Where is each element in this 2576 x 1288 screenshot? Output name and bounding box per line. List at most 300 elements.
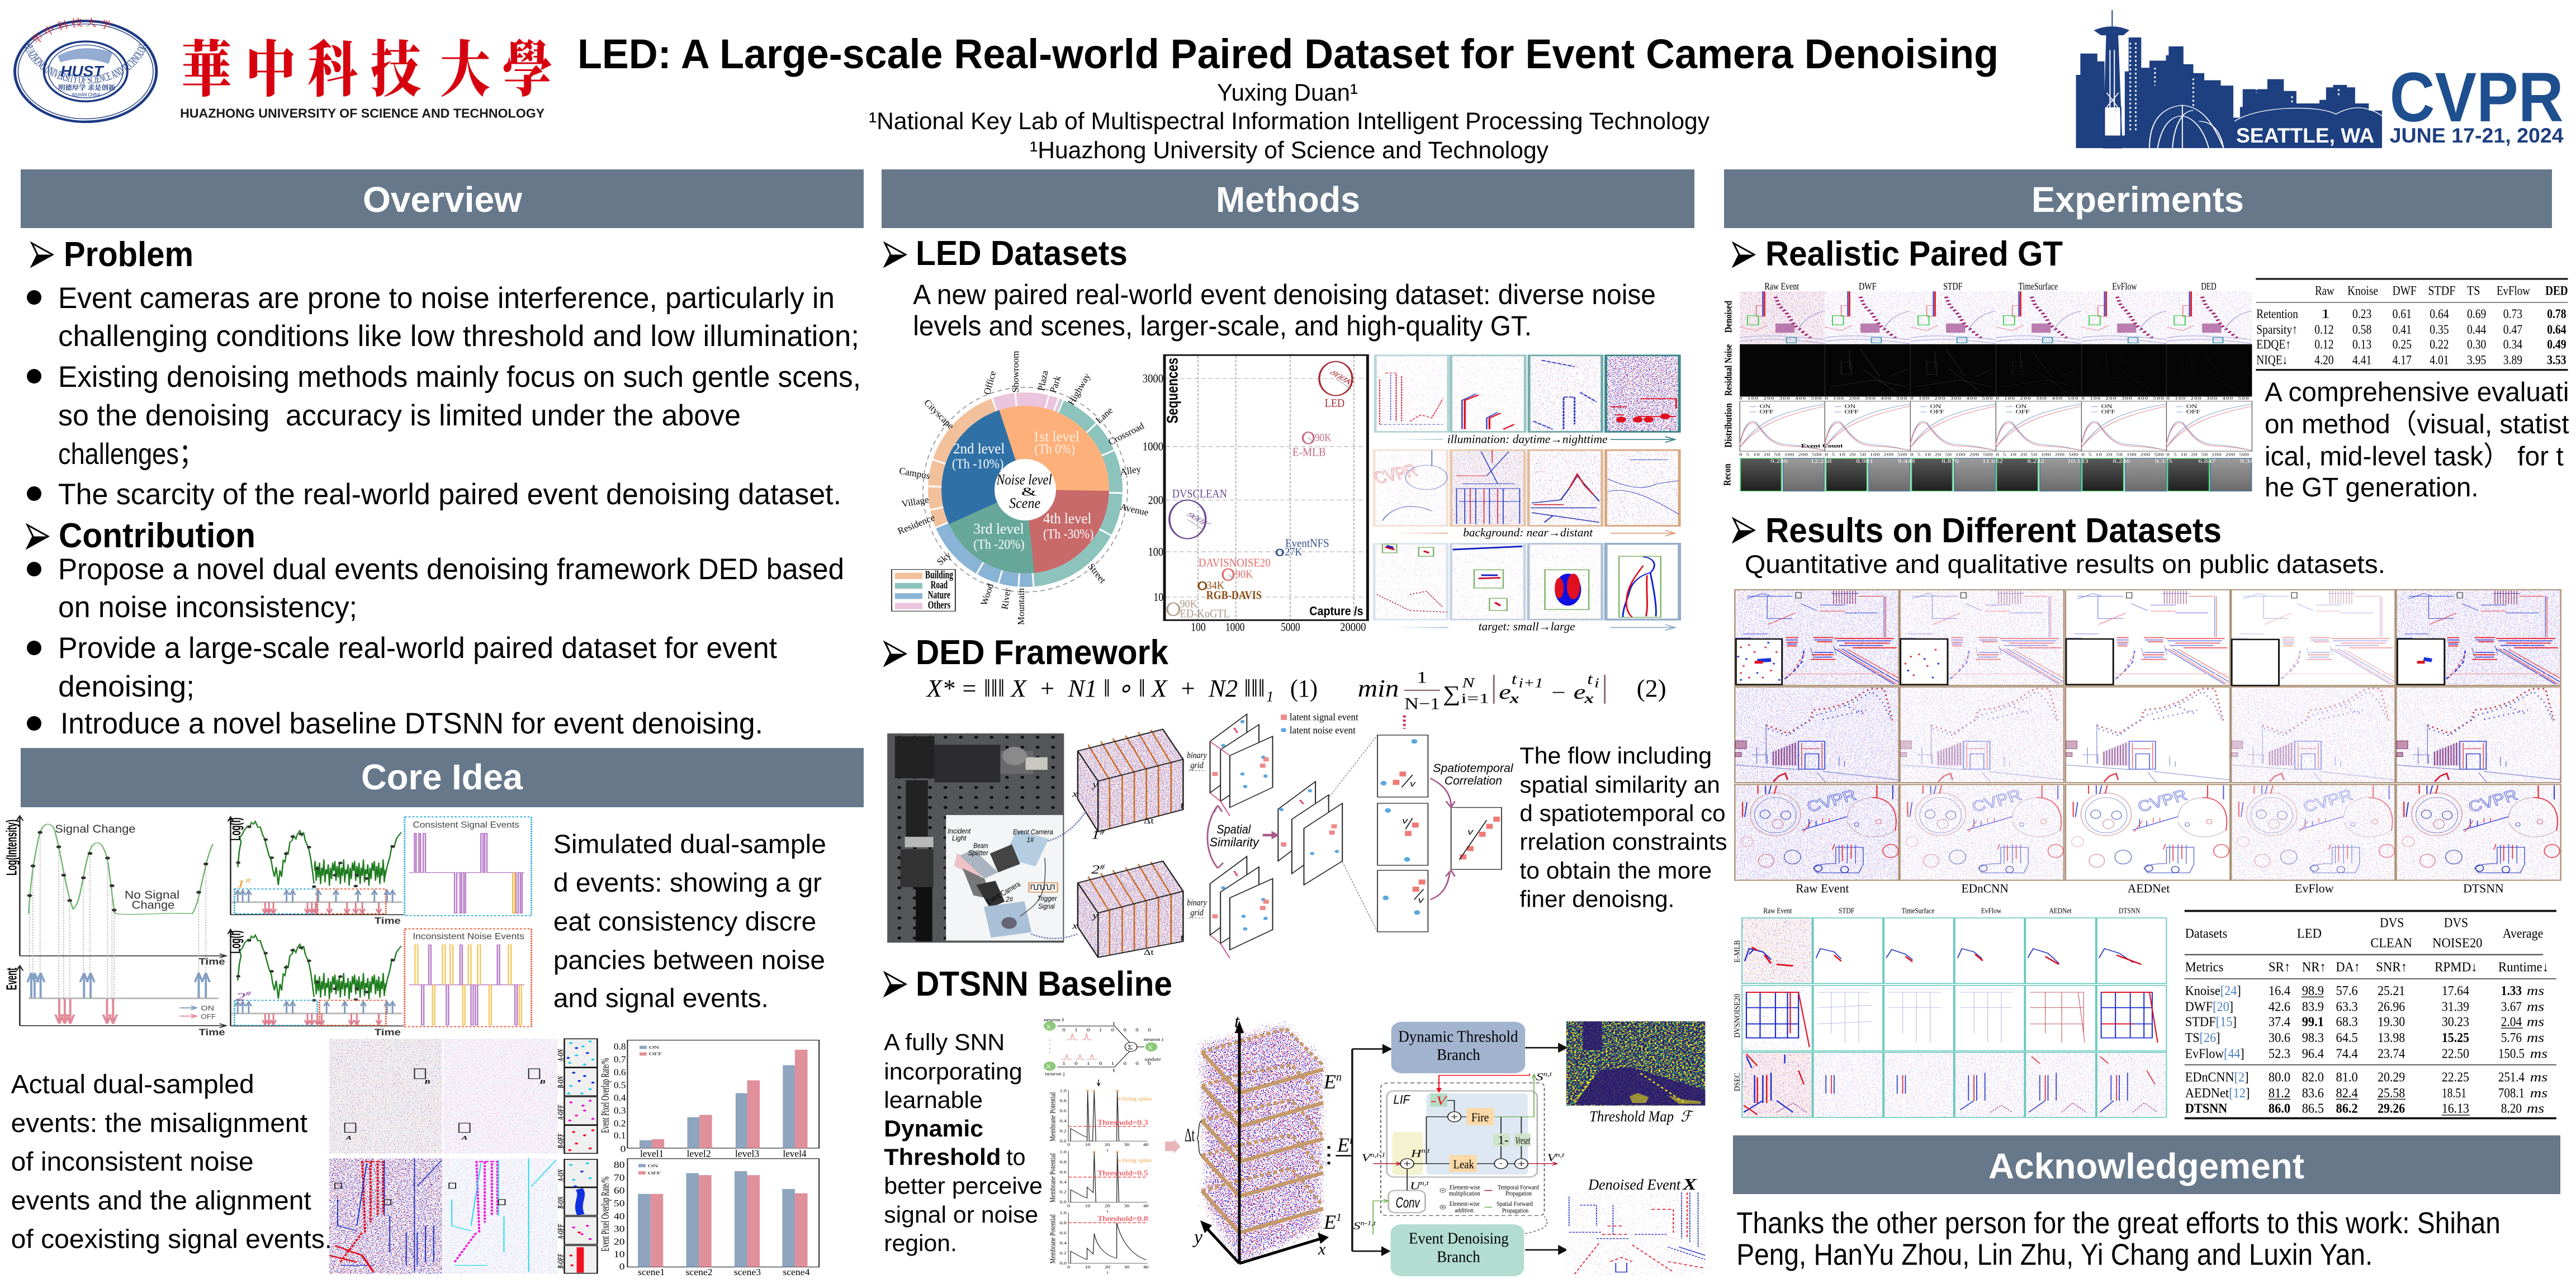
image: actual events low level [329,1039,558,1153]
diagram: LIF module: -V [1431,1093,1448,1107]
formula 2: i=1 [1461,691,1489,706]
chart: overlap rate by level: 0.5 [614,1080,626,1090]
image grid: qualitative results [1735,590,2561,896]
chart: inconsistent noise events [405,929,532,1026]
chart: membrane potential threshold 0.8: 0.8 [1059,1220,1067,1225]
table: quantitative results: 26.96 [2378,999,2405,1014]
box: event denoising branch [1391,1224,1524,1276]
row: distribution curves: 0 5 10 20 50 100 200 500 [2166,452,2249,457]
formula 2: i [1594,676,1599,691]
image: actual events low level: A [345,1135,352,1141]
donut category labels: Village [901,494,930,509]
chart: membrane potential threshold 0.3: 0.8 [1059,1098,1067,1103]
table: quantitative results: Metrics [2185,960,2223,974]
diagram: event cube 2#: x [1072,921,1078,931]
table: quantitative results: STDF[15] [2185,1015,2237,1029]
chart: dataset scatter capture vs sequences: 34K [1207,580,1224,591]
row: reconstruction thumbnails: 9.375 [2155,458,2172,464]
caption: target [1394,621,1675,633]
image: dual camera rig photo: Signal [1038,903,1055,911]
logo: CVPR Seattle [2076,10,2564,148]
image: dual camera rig photo [887,733,1064,943]
diagram: spatiotemporal correlation: v [1418,895,1424,905]
chart: dual sample 1#: 1 [236,877,245,890]
table: quantitative results: 42.6 [2269,999,2290,1014]
donut category labels: Sky [935,550,953,567]
chart: overlap rate by level: 0.8 [614,1041,626,1052]
diagram: LIF module: Element-wise [1450,1183,1480,1191]
chart: dual sample 2#: # [245,990,252,997]
diagram: LIF module: multiplication [1449,1190,1480,1197]
chart: membrane potential threshold 0.8: 0.4 [1059,1240,1067,1246]
column labels: AEDNet [2128,882,2170,896]
row: reconstruction thumbnails: 9.346 [2240,458,2257,464]
row: background [1369,450,1679,526]
chart: membrane potential threshold 0.5: Membrane Potential [1048,1153,1057,1202]
problem bullets [27,282,861,511]
chart: dual sample 2#: 2 [236,990,245,1003]
problem bullets: Existing denoising methods mainly focus on such gentle scens, [58,361,861,394]
chart: overlap rate by level: 0.3 [614,1105,626,1116]
table: GT evaluation metrics: 0.25 [2393,337,2412,352]
donut category labels: River [1000,588,1013,610]
text: simulated dual-sampled events [553,829,826,1013]
chart: overlap rate by scene: 40 [614,1211,625,1221]
problem bullets: The scarcity of the real-world paired event denoising dataset. [58,478,841,511]
image grid: per-dataset comparison: EvFlow [1981,907,2002,915]
text: DTSNN description: Threshold [884,1144,1001,1170]
diagram: spiking neuron: X [1046,1024,1051,1030]
logo: university seal: 华 中 科 技 大 学 [32,18,111,44]
text: flow description: d spatiotemporal co [1519,801,1726,827]
heading: DTSNN Baseline: DTSNN Baseline [916,965,1172,1003]
formula 1: (1) [1290,675,1318,702]
table: quantitative results: 86.5 [2302,1101,2324,1116]
table: quantitative results: SR↑ [2269,960,2290,974]
chart: membrane potential threshold 0.3: Threshold=0.3 [1097,1119,1148,1126]
table: quantitative results: 8.20 [2501,1101,2522,1116]
diagram: event cube 2#: Δt [1144,947,1154,956]
chart: dataset scatter capture vs sequences: 1000 [1143,441,1163,453]
logo: university seal: WUHAN CHINA [72,92,101,97]
panel: DED framework [887,668,1727,958]
image grid: per-dataset comparison: AEDNet [2049,907,2072,915]
diagram: data flow lines [1336,1043,1568,1256]
row: distribution curves: 0 100 200 300 400 500 [1825,396,1907,401]
table: quantitative results: 83.6 [2302,1086,2324,1100]
table: quantitative results: ms [2530,1070,2547,1085]
table: GT evaluation metrics: 0.34 [2503,337,2522,352]
table: GT evaluation metrics: 3.89 [2503,353,2522,367]
image: dual camera rig photo: Beam [973,842,988,850]
table: GT evaluation metrics: Retention [2256,307,2298,321]
image: dual camera rig photo: Event Camera [1013,828,1053,836]
table: quantitative results: ms [2527,999,2544,1014]
box: event denoising branch: Branch [1437,1248,1480,1266]
donut centre and level labels: Scene [1009,495,1040,512]
diagram: event cube 2#: 2 [1091,863,1100,877]
table: quantitative results: 63.3 [2336,999,2358,1014]
column labels: EvFlow [2295,882,2334,896]
diagram: spatiotemporal correlation [1377,716,1513,932]
donut category labels: Highway [1066,371,1092,407]
header bar: Acknowledgement: Acknowledgement [1988,1146,2304,1186]
chart: dataset scatter capture vs sequences [1143,355,1367,633]
text: DTSNN description: Dynamic [884,1116,983,1142]
image: dual camera rig photo: Event Camera [984,880,1023,906]
table: GT evaluation metrics: 0.30 [2467,337,2486,352]
table: quantitative results: 30.23 [2442,1015,2469,1029]
table: GT evaluation metrics: 0.58 [2352,323,2371,337]
chart: membrane potential threshold 0.3: 20 [1105,1142,1111,1147]
title: LED: A Large-scale Real-world Paired Dataset for Event Camera Denoising [577,31,1999,77]
table: quantitative results: 22.50 [2442,1046,2469,1061]
row: distribution curves: 0 100 200 300 400 500 [1739,396,1822,401]
table: GT evaluation metrics: 0.41 [2393,323,2412,337]
donut category labels: Alley [1119,463,1142,477]
authors and affiliations: ¹Huazhong University of Science and Technology [1030,137,1549,164]
logo: university seal: 明德厚学 求是创新 [58,83,115,92]
table: quantitative results: 29.26 [2378,1101,2405,1116]
chart: overlap rate by scene: OFF [648,1171,661,1176]
chart: membrane potential threshold 0.3: Membrane Potential [1048,1092,1057,1142]
chart: membrane potential threshold 0.3: 0.4 [1059,1119,1067,1123]
chart: membrane potential threshold 0.3 [1048,1088,1152,1153]
table: quantitative results: 19.30 [2378,1015,2405,1029]
donut category labels [896,351,1149,625]
zoom insets [1736,593,2463,685]
table: GT evaluation metrics: 0.23 [2352,307,2371,321]
caption: illumination: illumination: daytime→nighttime [1447,433,1608,446]
image: zoomed event crops: B-ON [556,1076,565,1088]
donut category labels: Plaza [1036,370,1050,392]
diagram: LIF module: n,t [1421,1147,1430,1154]
image: threshold map [1566,1021,1705,1125]
chart: overlap rate by level: level4 [783,1148,807,1159]
chart: membrane potential threshold 0.3: t [1107,1148,1109,1153]
diagram: spatiotemporal correlation: Correlation [1445,774,1502,787]
image grid: per-dataset comparison: DVSNOISE20 [1732,993,1741,1038]
chart: membrane potential threshold 0.8: 40 [1143,1265,1149,1269]
heading: Results on Different Datasets: Results on Different Datasets [1765,512,2222,550]
text: simulated dual-sampled events: eat consistency discre [553,907,816,936]
table: quantitative results: 1.33 [2501,983,2522,998]
header bar: Experiments [1724,169,2552,228]
authors and affiliations: Yuxing Duan¹ [1217,79,1358,106]
chart: membrane potential threshold 0.8: Membrane Potential [1048,1214,1057,1264]
column labels: Raw Event [1796,882,1849,896]
panel: realistic paired GT figure [1722,281,2257,491]
donut centre and level labels: (Th -30%) [1043,527,1093,542]
image: zoomed event crops: B-OFF [556,1133,565,1149]
diagram: LIF module: LIF [1394,1092,1411,1107]
table: quantitative results: EDnCNN[2] [2185,1070,2249,1085]
row: illumination [1375,356,1679,432]
table: quantitative results: 15.25 [2442,1030,2469,1045]
chart: signal change and events: Event [4,968,20,990]
header bar: Experiments: Experiments [2032,179,2244,220]
image: dual camera rig photo: Light [952,835,967,842]
donut legend [892,569,955,611]
table: quantitative results: 99.1 [2302,1015,2324,1029]
chart: overlap rate by scene: 10 [614,1249,625,1259]
chart: signal change and events: Change [132,898,174,911]
chart: overlap rate by level: OFF [649,1052,662,1057]
chart: membrane potential threshold 0.8: 0.2 [1059,1251,1067,1256]
table: quantitative results: DVS [2380,916,2404,930]
box: dynamic threshold branch [1391,1022,1525,1073]
diagram: event voxel cube: 1 [1336,1211,1342,1224]
chart: membrane potential threshold 0.3: 0.2 [1059,1129,1067,1133]
table: quantitative results: 37.4 [2269,1015,2290,1029]
logo: university name: 華中科技大學 [181,36,552,105]
diagram: spatiotemporal correlation: v [1467,827,1474,837]
donut centre and level labels: 3rd level [973,521,1024,537]
text: DTSNN description: learnable [884,1087,983,1113]
table: quantitative results: ms [2527,1015,2544,1029]
image grid: per-dataset comparison: Raw Event [1763,907,1792,915]
diagram: event cube 1#: 1 [1091,828,1100,842]
heading: LED Datasets: LED Datasets [916,234,1128,273]
formula 2: t [1587,671,1593,688]
chart: membrane potential threshold 0.8: 20 [1105,1265,1111,1269]
chart: membrane potential threshold 0.5 [1048,1149,1152,1214]
chart: dual sample 2#: Log(I) [228,930,244,954]
contribution bullets: on noise inconsistency; [58,591,357,624]
formula 2: − [1551,681,1566,703]
problem bullets: challenges； [58,438,204,471]
chart: dataset scatter capture vs sequences: 90K [1315,432,1332,443]
image grid: per-dataset comparison [1732,907,2166,1117]
table: GT evaluation metrics: 0.64 [2430,307,2449,321]
column labels [1796,882,2504,896]
diagram: LIF module: n,t [1556,1151,1565,1158]
donut category labels: Cityscape [922,397,956,432]
diagram: LIF module: V [1362,1152,1370,1163]
text: flow description: rrelation constraints [1519,829,1727,855]
chart: overlap rate by level: 0.7 [614,1054,626,1064]
formula 1: X* = ‖‖‖ X + N1 ‖ ∘ ‖ X + N2 ‖‖‖₁ [926,675,1273,702]
row labels: Residual Noise [1723,344,1734,396]
chart: overlap rate by level: 0.2 [614,1118,626,1129]
chart: dual sample 1#: Log(I) [228,817,244,841]
diagram: spiking neuron: t [1113,1020,1115,1026]
row labels: Denoised [1723,300,1734,333]
text: DTSNN description: region. [884,1230,957,1257]
column labels: EDnCNN [1962,882,2009,896]
table: quantitative results: 81.2 [2269,1086,2290,1100]
formula 2: N [1461,675,1476,691]
diagram: LIF module: n,t [1543,1071,1552,1078]
diagram: LIF module: H [1411,1147,1421,1159]
text: acknowledgement [1736,1205,2501,1271]
chart: membrane potential threshold 0.3: 40 [1143,1142,1149,1147]
header bar: Overview: Overview [363,179,522,220]
chart: overlap rate by level: 0.1 [614,1130,626,1140]
diagram: spiking neuron: X [1046,1064,1051,1069]
table: quantitative results: 96.4 [2302,1046,2324,1061]
text: DTSNN description: better perceive [884,1173,1043,1199]
chart: membrane potential threshold 0.5: t [1107,1209,1109,1214]
chart: dual sample 1#: # [245,877,252,884]
table: quantitative results: ms [2527,983,2544,998]
donut centre and level labels [952,429,1093,552]
diagram: event voxel cube: E [1324,1071,1336,1093]
chart: membrane potential threshold 0.8: t [1107,1270,1109,1275]
table: GT evaluation metrics: 4.41 [2352,353,2371,367]
chart: signal change and events: No Signal [125,888,179,901]
diagram: spiking neuron: 1 0 1 0 1 0 0 0 [1062,1061,1155,1066]
row: distribution curves: 0 5 10 20 50 100 200 500 [1825,452,1907,457]
table: GT evaluation metrics: EvFlow [2497,284,2530,298]
donut sectors [950,414,1101,565]
text: flow description: The flow including [1519,743,1712,769]
text: DTSNN description: A fully SNN [884,1030,1005,1055]
diagram: event cube 1#: # [1100,828,1105,837]
image grid: per-dataset comparison: TimeSurface [1902,907,1935,915]
table: quantitative results: 57.6 [2336,983,2358,998]
logo: CVPR Seattle: SEATTLE, WA [2236,125,2374,148]
chart: dataset scatter capture vs sequences: 100 [1191,621,1206,633]
table: GT evaluation metrics: NIQE↓ [2256,353,2288,367]
table: GT evaluation metrics: TS [2467,284,2480,298]
table: quantitative results: 251.4 [2498,1070,2525,1085]
heading: DED Framework: DED Framework [916,633,1168,672]
formula 2: e [1499,680,1511,703]
image: actual events low level: B [424,1079,430,1085]
chart: membrane potential threshold 0.8: 0.6 [1059,1230,1067,1235]
diagram: event voxel cube: E [1337,1134,1349,1156]
chart: dataset scatter capture vs sequences: LED [1325,397,1344,410]
logo: university seal: HUST [60,63,105,79]
row: distribution curves: 0 5 10 20 50 100 200 500 [1996,452,2078,457]
table: quantitative results: NOISE20 [2432,935,2482,950]
diagram: LIF module: 1- [1498,1133,1509,1147]
donut category labels: Mountain [1016,588,1026,625]
diagram: event cube 1#: binary [1187,750,1207,760]
chart: membrane potential threshold 0.5: 0 [1067,1204,1071,1208]
chart: membrane potential threshold 0.5: 40 [1143,1204,1149,1208]
image: zoomed event crops [556,1039,597,1273]
donut category labels: Lane [1093,405,1115,425]
table: GT evaluation metrics: 0.73 [2503,307,2522,321]
column headers: STDF [1943,281,1963,292]
chart: overlap rate by scene [599,1159,819,1278]
donut centre and level labels: (Th 0%) [1034,442,1075,457]
chart: signal change and events: Time [198,956,225,967]
table: quantitative results: NR↑ [2302,960,2326,974]
diagram: event voxel cube: t [1234,1011,1240,1032]
chart: membrane potential threshold 0.8 [1048,1210,1149,1275]
chart: overlap rate by level: level1 [640,1148,664,1159]
formula 2: i+1 [1518,676,1543,691]
table: quantitative results: 22.25 [2442,1070,2469,1085]
chart: membrane potential threshold 0.8: 10 [1085,1265,1091,1269]
table: GT evaluation metrics: 0.61 [2393,307,2412,321]
text: DTSNN description [884,1030,1043,1257]
chart: membrane potential threshold 0.5: 10 [1085,1204,1091,1208]
diagram: event cube 2#: binary [1187,898,1207,907]
column headers: TimeSurface [2019,281,2058,292]
table: quantitative results: 82.0 [2302,1070,2324,1085]
table: quantitative results: DVS [2444,916,2468,930]
diagram: event cube 1#: y [1091,780,1098,790]
text: actual dual-sampled events: of coexisting signal events. [11,1224,332,1253]
diagram: spiking neuron: neuron j [1045,1072,1065,1077]
diagram: event cube 1#: Δt [1144,816,1154,825]
diagram: LIF module: U [1410,1180,1420,1192]
header bar: Core Idea: Core Idea [361,757,523,797]
table: quantitative results: 25.58 [2378,1086,2405,1100]
text: simulated dual-sampled events: Simulated dual-sample [553,829,826,859]
donut category labels: Residence [896,512,936,537]
table: quantitative results: 82.4 [2336,1086,2358,1100]
table: GT evaluation metrics: 4.17 [2393,353,2412,367]
diagram: event cube 1#: x [1072,789,1078,799]
table: quantitative results: DA↑ [2336,960,2360,974]
row: distribution curves: 0 100 200 300 400 500 [1910,396,1993,401]
table: quantitative results: 20.29 [2378,1070,2405,1085]
diagram: event cube 2#: t [1181,933,1184,943]
contribution bullets: Provide a large-scale real-world paired dataset for event [58,632,777,665]
diagram: event cube 2#: y [1091,911,1098,921]
column headers: Raw Event [1764,281,1799,292]
row: background: CVPR [1369,461,1422,487]
diagram: event cube 1#: grid [1190,760,1204,770]
diagram: event voxel cube: E [1324,1211,1336,1233]
formula 2: t [1512,671,1518,688]
chart: overlap rate by level: 0 [621,1144,626,1154]
image: dual camera rig photo: 2# [1005,896,1014,903]
row: distribution curves: 0 100 200 300 400 500 [2081,396,2164,401]
diagram: LIF module: Temporal Forward [1498,1183,1539,1191]
table: quantitative results: 81.0 [2336,1070,2358,1085]
formula 2: x [1509,691,1519,706]
diagram: LIF module: Vreset [1516,1134,1530,1147]
chart: overlap rate by scene: ON [648,1164,659,1168]
formula 2: N−1 [1404,694,1440,713]
diagram: spiking neuron: neuron i [1144,1037,1164,1043]
diagram: LIF module: Fire [1471,1110,1489,1124]
donut category labels: Office [982,370,998,396]
table: GT evaluation metrics [2256,279,2568,370]
chart: signal change and events: Time [198,1027,225,1037]
chart: dataset scatter capture vs sequences: 800K [1328,369,1357,386]
diagram: event voxel cube: y [1192,1227,1203,1248]
chart: membrane potential threshold 0.5: 0.4 [1059,1180,1067,1185]
diagram: spiking neuron: t [1113,1067,1115,1073]
text: flow description: to obtain the more [1519,858,1712,884]
table: quantitative results: 25.21 [2378,983,2405,998]
chart: membrane potential threshold 0.8: 0.0 [1059,1261,1067,1266]
formula 2: (2) [1637,675,1666,702]
table: quantitative results: 68.3 [2336,1015,2358,1029]
row: reconstruction thumbnails: 6.847 [2198,458,2215,464]
image: zoomed event crops: B-ON [556,1196,565,1209]
authors and affiliations: ¹National Key Lab of Multispectral Information Intelligent Processing Technology [869,108,1710,135]
image: denoised event [1566,1176,1705,1276]
chart: consistent signal events [405,817,532,916]
table: quantitative results: 52.3 [2269,1046,2290,1061]
table: GT evaluation metrics: Knoise [2347,284,2378,298]
table: GT evaluation metrics: 0.69 [2467,307,2486,321]
table: GT evaluation metrics: 0.35 [2430,323,2449,337]
image grid: per-dataset comparison: STDF [1839,907,1855,915]
text: results subtitle: Quantitative and qualitative results on public datasets. [1745,550,2385,579]
column headers: DWF [1859,281,1877,292]
text: simulated dual-sampled events: pancies between noise [553,945,825,975]
chart: overlap rate by scene: 50 [614,1199,625,1209]
